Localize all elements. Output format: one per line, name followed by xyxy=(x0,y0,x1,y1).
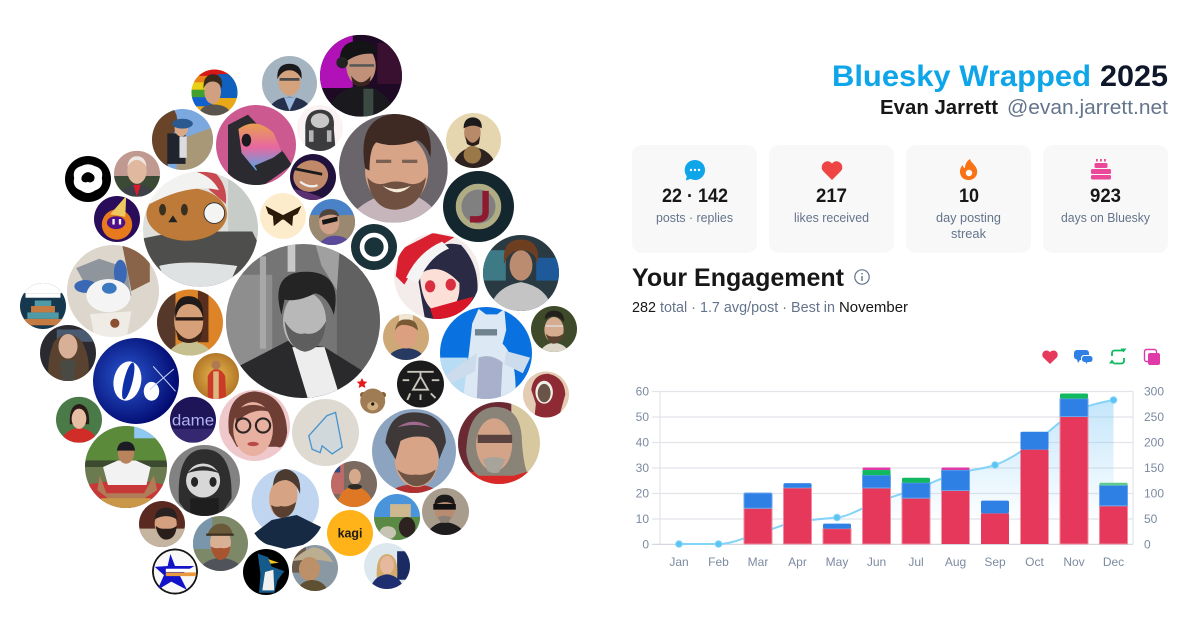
month labels: Sep xyxy=(984,555,1006,569)
panel: day posting streak: day posting xyxy=(936,210,1001,225)
avatar: kagi logo xyxy=(327,510,373,556)
panel: posts and replies: 22 · 142 xyxy=(662,186,728,207)
bar: April xyxy=(784,483,812,544)
month labels: Apr xyxy=(788,555,807,569)
month labels: Nov xyxy=(1063,555,1085,569)
profile name and handle: Evan Jarrett xyxy=(880,97,998,119)
right axis labels: 300 xyxy=(1144,384,1164,398)
month labels: Dec xyxy=(1103,555,1124,569)
month labels: Jul xyxy=(908,555,924,569)
profile name and handle xyxy=(880,97,1168,119)
stacked bars xyxy=(744,394,1128,544)
engagement summary: November xyxy=(839,300,908,316)
avatar: bear with red star xyxy=(357,378,386,414)
line markers xyxy=(676,397,1117,547)
avatar: red hood figure xyxy=(523,372,569,418)
avatar: anime girl in santa hat xyxy=(394,233,480,319)
avatar: dog in front of building xyxy=(374,494,420,540)
avatar: smiling man on light blue xyxy=(252,469,323,549)
avatar: penguin on black xyxy=(243,549,289,595)
right axis labels: 200 xyxy=(1144,436,1164,450)
left axis labels: 30 xyxy=(636,461,649,475)
avatar: pink horse with headset xyxy=(216,105,296,185)
title: 2025 xyxy=(1100,60,1168,93)
avatar: woman in red jacket in forest xyxy=(56,396,102,443)
avatar: black flower logo xyxy=(65,156,111,202)
month labels: Jun xyxy=(867,555,886,569)
chart grid xyxy=(652,391,1133,544)
panel: posts and replies xyxy=(632,145,757,253)
right axis labels: 0 xyxy=(1144,538,1151,552)
panel: day posting streak xyxy=(906,145,1031,253)
month labels: Mar xyxy=(748,555,768,569)
left axis labels: 0 xyxy=(642,538,649,552)
avatar: blue shark sketch on paper xyxy=(292,399,359,466)
icon: flame xyxy=(960,159,977,180)
panel: day posting streak: streak xyxy=(951,226,986,241)
avatar: illustrated woman with glasses xyxy=(219,390,290,461)
avatar: large smiling man with beard xyxy=(339,114,448,223)
title: Bluesky Wrapped xyxy=(832,60,1091,93)
engagement summary xyxy=(632,300,908,316)
avatar: man in sunglasses outdoors xyxy=(309,199,355,245)
avatar: long grey hair man with sunglasses xyxy=(458,402,540,484)
left axis labels: 50 xyxy=(636,410,649,424)
engagement summary: 282 xyxy=(632,300,656,316)
avatar: man with pink streak hair xyxy=(372,409,456,493)
avatar: man with glasses in blue suit xyxy=(262,56,317,111)
avatar: dame wordmark xyxy=(170,396,216,443)
bar: October xyxy=(1020,432,1048,544)
avatar: furry illustration xyxy=(67,245,159,337)
avatar: building logo xyxy=(20,283,66,329)
panel: likes received: 217 xyxy=(816,186,847,207)
panel: days on Bluesky xyxy=(1043,145,1168,253)
panel: days on Bluesky: days on Bluesky xyxy=(1061,210,1150,225)
avatar: dark butterfly on cream xyxy=(260,193,306,239)
panel: day posting streak: 10 xyxy=(959,186,979,207)
avatar: man in dark sunglasses xyxy=(422,488,469,535)
cumulative area fill xyxy=(679,400,1114,544)
right axis labels: 150 xyxy=(1144,461,1164,475)
avatar: white dragon on blue sky xyxy=(440,307,532,399)
bar: November xyxy=(1060,394,1088,544)
month labels: Aug xyxy=(945,555,966,569)
left axis labels xyxy=(636,384,649,552)
avatar: man with glasses, purple tones xyxy=(290,154,336,200)
bar: March xyxy=(744,493,772,544)
left axis labels: 60 xyxy=(636,384,649,398)
chart: monthly engagement stacked bars with cumulative line xyxy=(636,384,1164,569)
left axis labels: 20 xyxy=(636,486,649,500)
avatar: bearded man with cat xyxy=(446,113,501,168)
icon: chat bubble xyxy=(685,160,705,180)
month labels: May xyxy=(826,555,848,569)
cumulative line xyxy=(679,400,1114,544)
panel: days on Bluesky: 923 xyxy=(1090,186,1121,207)
left axis labels: 10 xyxy=(636,512,649,526)
avatar: astronaut in orange suit xyxy=(331,461,377,507)
heading: your engagement: Your Engagement xyxy=(632,264,845,292)
avatar: man in cap with red beard xyxy=(193,516,248,571)
bar: December xyxy=(1100,483,1128,544)
bar: July xyxy=(902,478,930,544)
icon: quotes copy squares xyxy=(1144,350,1160,365)
bar: June xyxy=(862,468,890,544)
avatar: monochrome anime character xyxy=(297,105,343,151)
avatar: black drawing with triangle xyxy=(397,360,444,408)
avatar: blue star badge xyxy=(152,548,198,594)
avatar: man in white shirt on boat xyxy=(85,426,167,508)
avatar: wreath with letter J xyxy=(443,171,514,242)
chart legend xyxy=(1042,348,1160,365)
panel: avatar bubble cloud xyxy=(20,35,577,595)
avatar: dark teal gear logo xyxy=(351,224,397,270)
icon: birthday cake xyxy=(1091,159,1111,180)
icon: replies bubbles xyxy=(1074,350,1092,364)
avatar: 0s logo on navy xyxy=(93,338,179,424)
right axis labels xyxy=(1144,384,1164,552)
avatar: man with glasses and beard, foliage xyxy=(531,306,577,352)
panel: posts and replies: posts · replies xyxy=(656,210,733,225)
panel: likes received xyxy=(769,145,894,253)
avatar: grey anime girl xyxy=(169,445,240,516)
month labels xyxy=(669,555,1124,569)
avatar: person in hat by rocks xyxy=(152,109,213,170)
avatar: streamer with headset on magenta xyxy=(320,34,402,117)
icon: repost arrows xyxy=(1109,348,1126,364)
right axis labels: 50 xyxy=(1144,512,1158,526)
avatar: blond man in blue shirt xyxy=(383,314,429,360)
avatar: long haired man xyxy=(40,325,96,381)
panel: likes received: likes received xyxy=(794,210,869,225)
avatar: kagi logo: kagi xyxy=(338,526,362,541)
avatar: bald man in suit with red tie xyxy=(114,150,160,197)
engagement summary: total · 1.7 avg/post · Best in xyxy=(660,300,835,316)
avatar: man with glasses on orange xyxy=(157,290,223,356)
profile name and handle: @evan.jarrett.net xyxy=(1007,97,1168,119)
bar: May xyxy=(823,524,851,544)
right axis labels: 250 xyxy=(1144,410,1164,424)
avatar: curly haired man in white henley xyxy=(483,235,559,311)
icon: info xyxy=(855,270,869,284)
month labels: Jan xyxy=(669,555,689,569)
avatar: dame wordmark: dame xyxy=(172,413,214,430)
right axis labels: 100 xyxy=(1144,486,1164,500)
month labels: Oct xyxy=(1025,555,1044,569)
avatar: bearded man with undercut xyxy=(139,501,185,547)
avatar: wizard pumpkin xyxy=(94,196,140,242)
avatar: man in wide brim hat xyxy=(292,545,338,591)
avatar: blonde woman xyxy=(364,543,410,589)
icon: likes heart xyxy=(1042,351,1058,364)
avatar: rainbow background man xyxy=(192,70,238,116)
avatar: pumpkin head in santa hat xyxy=(143,172,258,287)
icon: heart xyxy=(822,161,842,180)
month labels: Feb xyxy=(708,555,729,569)
bar: August xyxy=(942,468,970,544)
avatar: man in red robe on gold xyxy=(193,353,239,399)
avatar: black and white main profile man xyxy=(226,244,380,398)
bar: September xyxy=(981,501,1009,544)
left axis labels: 40 xyxy=(636,436,649,450)
